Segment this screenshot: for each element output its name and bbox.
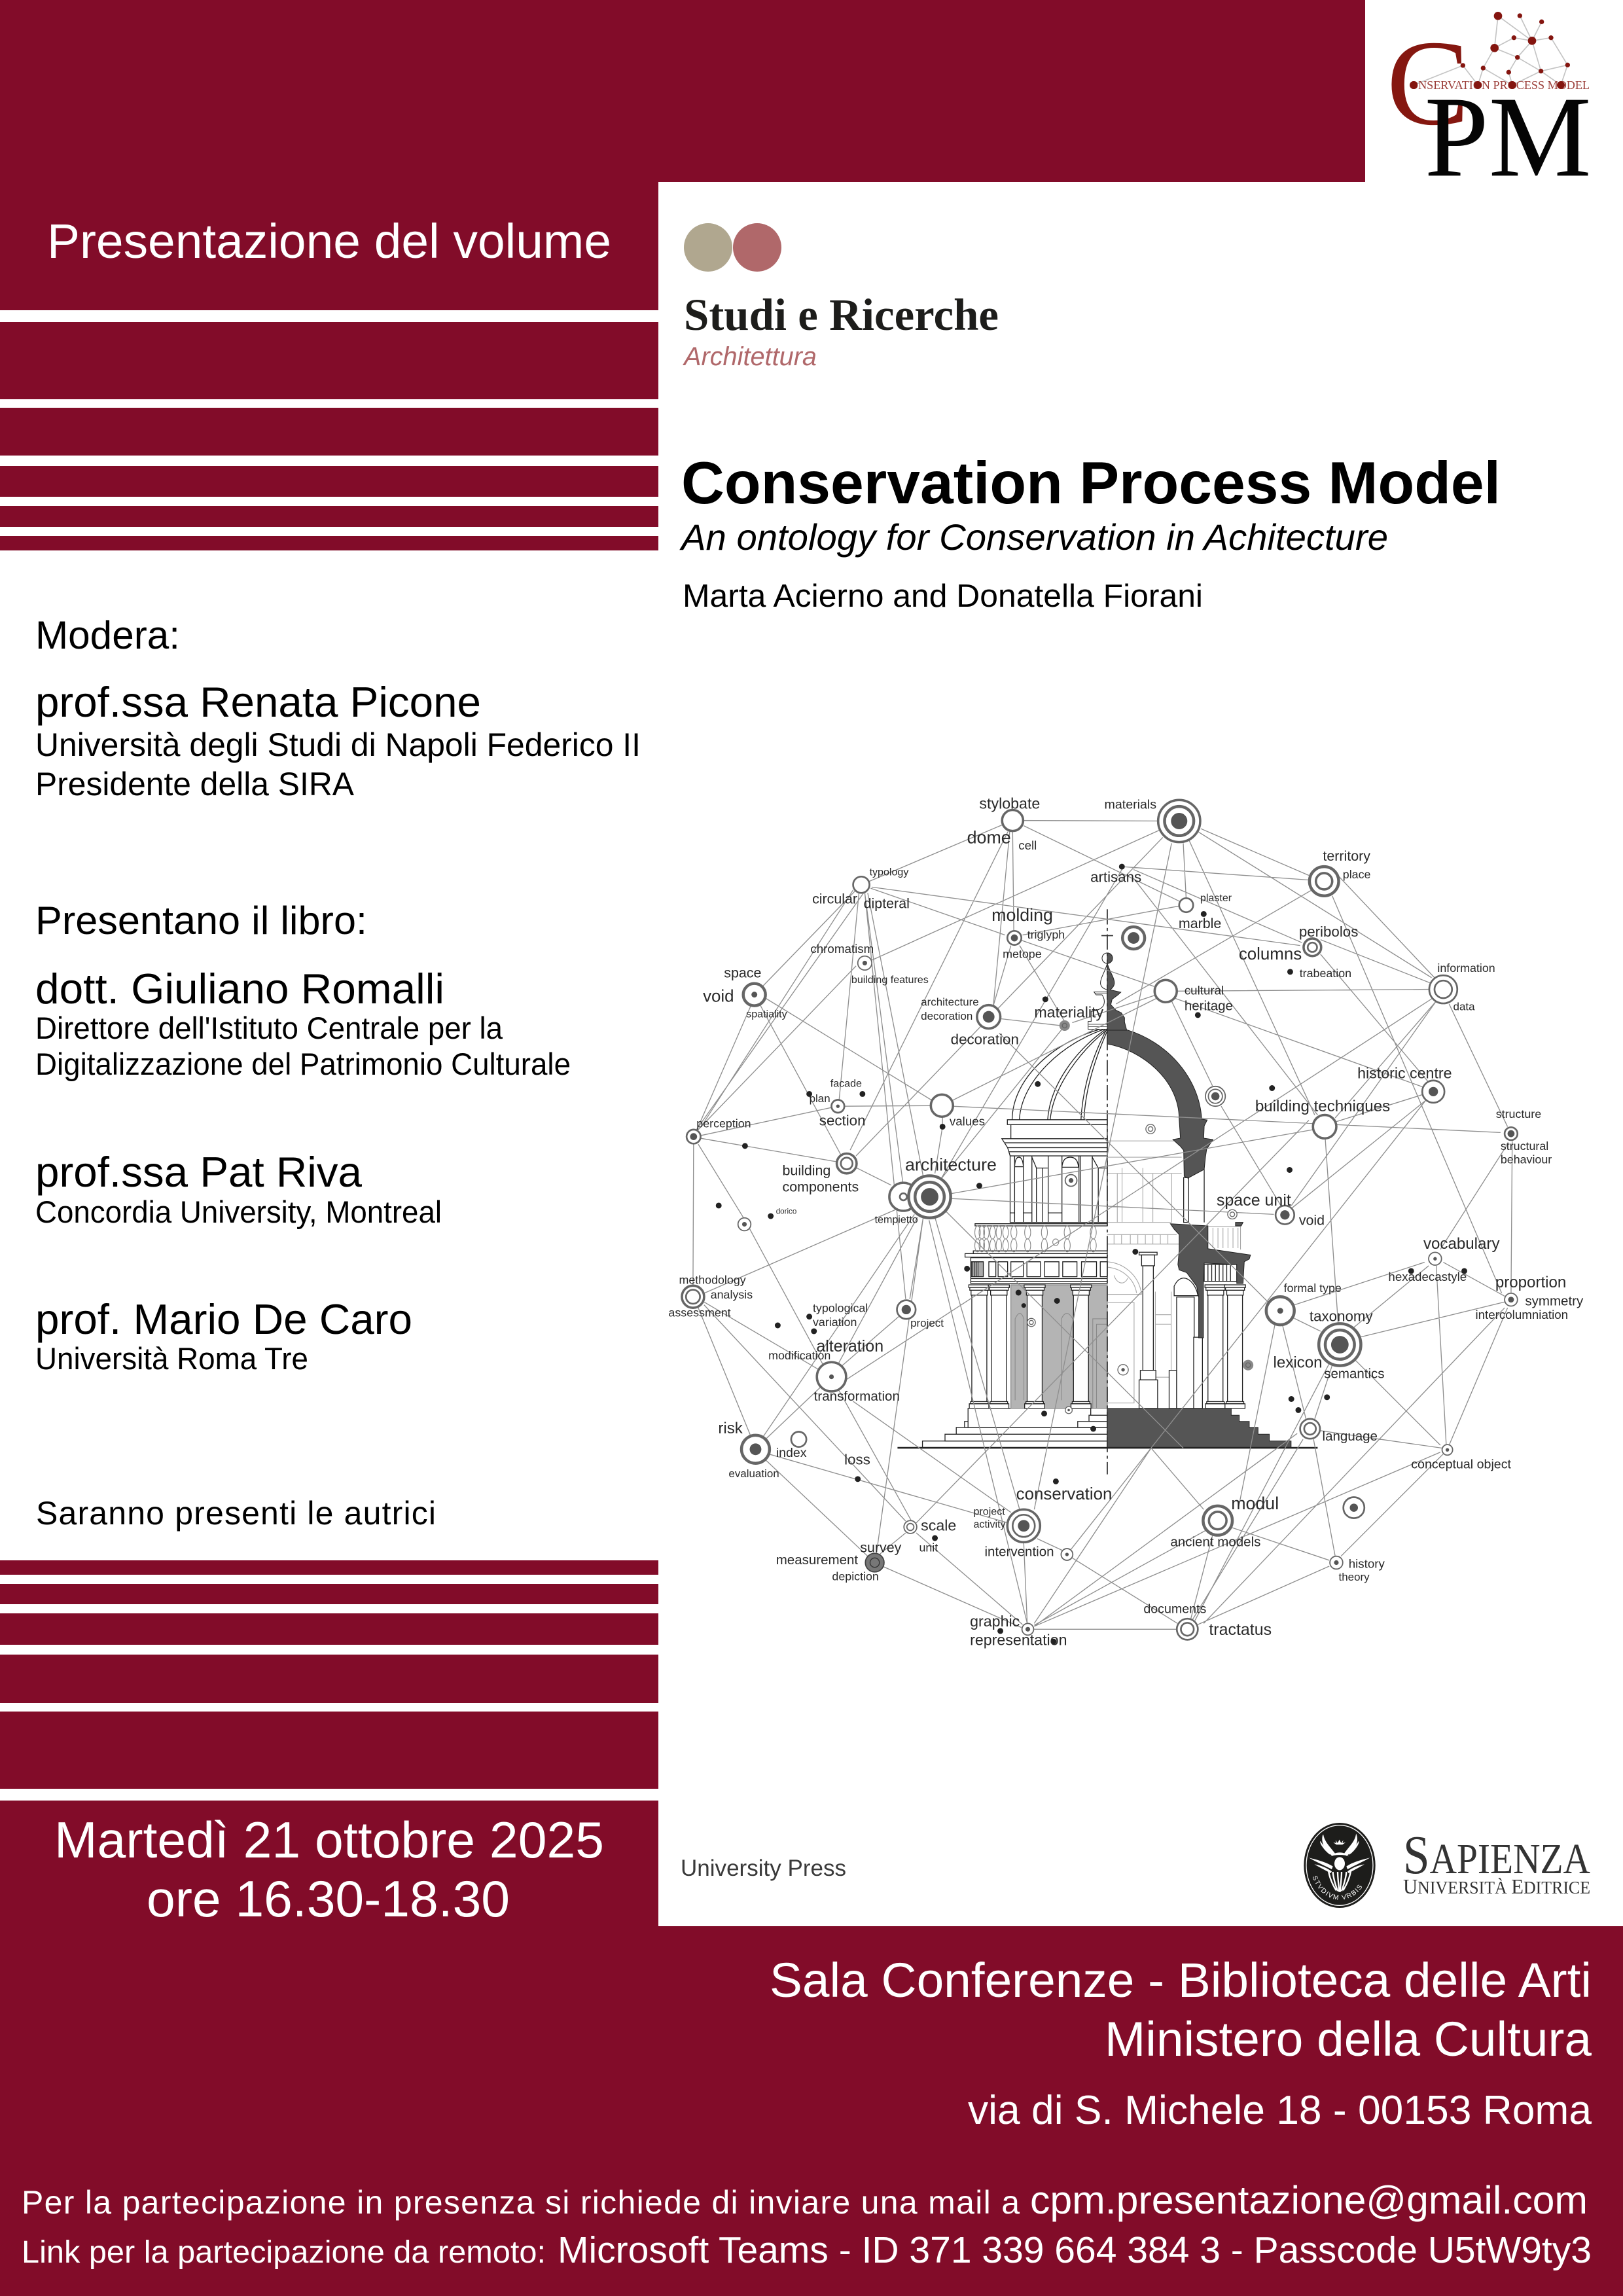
venue: Sala Conferenze - Biblioteca delle Arti xyxy=(770,1953,1592,2007)
logo nodes xyxy=(1410,12,1570,89)
network labels: space xyxy=(724,965,761,981)
network labels xyxy=(668,795,1584,1648)
network labels: symmetry xyxy=(1525,1294,1584,1309)
network labels: vocabulary xyxy=(1423,1235,1500,1253)
network labels: hexadecastyle xyxy=(1388,1270,1467,1283)
network labels: alteration xyxy=(816,1337,883,1355)
network edges xyxy=(693,821,1512,1629)
network labels: trabeation xyxy=(1300,967,1351,980)
logo tagline: ONSERVATION PROCESS MODEL xyxy=(1410,79,1590,92)
centre axis xyxy=(1101,909,1113,1475)
network labels: modification xyxy=(768,1349,830,1362)
network labels: space unit xyxy=(1217,1191,1291,1210)
network labels: risk xyxy=(718,1420,743,1437)
node: taxonomy xyxy=(1319,1323,1361,1366)
steps and platform xyxy=(923,1408,1107,1448)
frieze xyxy=(965,1253,1107,1283)
network labels: intervention xyxy=(984,1545,1054,1560)
series mark: two circles xyxy=(684,223,781,272)
network labels: project xyxy=(973,1505,1005,1517)
network labels: ancient models xyxy=(1170,1534,1260,1549)
text block: moderator xyxy=(35,613,641,802)
section cut: base xyxy=(1107,1408,1291,1448)
network labels: variation xyxy=(813,1316,857,1329)
network labels: conceptual object xyxy=(1411,1458,1512,1472)
text block: speakers: dott. Giuliano Romalli xyxy=(35,965,444,1013)
text block: moderator: Presidente della SIRA xyxy=(35,766,355,802)
network labels: dome xyxy=(967,827,1011,847)
participation info: Per la partecipazione in presenza si richiede di inviare una mail a xyxy=(22,2184,1020,2221)
network labels: graphic xyxy=(970,1613,1020,1630)
network labels: dipteral xyxy=(864,895,910,911)
network labels: place xyxy=(1343,868,1371,881)
network labels: formal type xyxy=(1284,1282,1342,1295)
network labels: history xyxy=(1349,1557,1385,1571)
left heading band xyxy=(0,182,658,310)
network labels: representation xyxy=(970,1631,1067,1648)
network nodes xyxy=(682,800,1518,1644)
book subtitle: An ontology for Conservation in Achitecture xyxy=(679,516,1388,558)
logo letters PM: PM xyxy=(1425,73,1592,201)
network labels: architecture xyxy=(921,996,979,1009)
network labels: triglyph xyxy=(1027,928,1065,941)
logo network lines xyxy=(1414,16,1567,85)
network labels: theory xyxy=(1339,1571,1370,1583)
network labels: historic centre xyxy=(1357,1064,1452,1081)
network labels: cell xyxy=(1018,838,1037,852)
network labels: decoration xyxy=(921,1010,972,1022)
network labels: facade xyxy=(830,1078,862,1090)
network labels: materiality xyxy=(1034,1003,1103,1020)
balustrade xyxy=(973,1224,1107,1253)
network labels: tempietto xyxy=(875,1214,918,1226)
network labels: plaster xyxy=(1200,892,1232,904)
text block: speakers: prof. Mario De Caro xyxy=(35,1295,412,1343)
network labels: information xyxy=(1437,961,1495,975)
icon: Sapienza seal xyxy=(1304,1823,1376,1908)
network labels: typology xyxy=(870,866,908,878)
header band xyxy=(0,0,1365,182)
network labels: circular xyxy=(812,891,857,906)
participation info xyxy=(22,2178,1592,2271)
text block: speakers: Presentano il libro: xyxy=(35,899,367,942)
network labels: language xyxy=(1323,1429,1378,1444)
network labels: architecture xyxy=(905,1155,997,1174)
publisher: university press: University Press xyxy=(681,1856,846,1881)
network labels: decoration xyxy=(951,1031,1019,1048)
network labels: survey xyxy=(860,1539,902,1555)
network labels: building techniques xyxy=(1255,1098,1390,1115)
network labels: territory xyxy=(1323,848,1370,864)
footer band xyxy=(0,1801,1623,2296)
network labels: marble xyxy=(1179,916,1221,931)
venue xyxy=(770,1953,1592,2133)
right half, light elevation xyxy=(1107,1141,1182,1403)
network labels: behaviour xyxy=(1501,1153,1552,1166)
network labels: metope xyxy=(1003,947,1042,960)
network labels: columns xyxy=(1239,945,1302,963)
network labels: unit xyxy=(919,1541,938,1554)
other rings and dots xyxy=(682,810,1518,1640)
ontology network xyxy=(668,795,1584,1648)
network labels: tractatus xyxy=(1209,1621,1272,1639)
venue: via di S. Michele 18 - 00153 Roma xyxy=(968,2088,1592,2133)
network labels: taxonomy xyxy=(1310,1308,1373,1325)
dome, elevation xyxy=(1012,1028,1107,1120)
date and time: Martedì 21 ottobre 2025 xyxy=(54,1811,604,1869)
date and time: ore 16.30-18.30 xyxy=(147,1870,510,1928)
network labels: components xyxy=(783,1179,859,1195)
network labels: structure xyxy=(1496,1107,1541,1121)
small black dots xyxy=(716,864,1467,1644)
text block: moderator: prof.ssa Renata Picone xyxy=(35,678,481,726)
text block: speakers: Direttore dell'Istituto Centrale per la xyxy=(35,1011,503,1045)
text block: speakers: Concordia University, Montreal xyxy=(35,1194,442,1229)
network labels: void xyxy=(703,987,734,1005)
series subtitle: Architettura xyxy=(683,342,817,371)
network labels: activity xyxy=(973,1518,1006,1530)
network labels: cultural xyxy=(1185,984,1224,997)
text block: speakers: Digitalizzazione del Patrimonio Culturale xyxy=(35,1047,571,1081)
network labels: intercolumniation xyxy=(1475,1308,1568,1321)
network labels: void xyxy=(1299,1212,1325,1228)
network labels: molding xyxy=(991,905,1053,925)
text block: speakers: Università Roma Tre xyxy=(35,1341,308,1376)
icon: Sapienza seal: STVDIVM VRBIS xyxy=(1313,1876,1362,1900)
network labels: proportion xyxy=(1495,1274,1566,1291)
network labels: spatiality xyxy=(746,1008,787,1020)
drum xyxy=(1002,1120,1107,1223)
venue: Ministero della Cultura xyxy=(1105,2012,1592,2066)
network labels: perception xyxy=(696,1117,751,1130)
network labels: methodology xyxy=(679,1274,746,1287)
node: conservation xyxy=(1007,1509,1040,1542)
network labels: building features xyxy=(851,974,929,986)
network labels: structural xyxy=(1501,1139,1548,1153)
lower colonnade, elevation xyxy=(969,1285,1107,1408)
network labels: heritage xyxy=(1185,999,1233,1014)
network labels: materials xyxy=(1104,798,1156,812)
network labels: analysis xyxy=(711,1288,753,1301)
network labels: building xyxy=(783,1163,830,1179)
lantern, left elevation xyxy=(1088,963,1107,1030)
text block: speakers: prof.ssa Pat Riva xyxy=(35,1148,363,1196)
section cut: balcony and wall xyxy=(1170,1224,1251,1338)
series title: Studi e Ricerche xyxy=(684,290,999,340)
network labels: modul xyxy=(1231,1494,1279,1513)
network labels: depiction xyxy=(832,1570,879,1583)
network labels: evaluation xyxy=(728,1467,779,1480)
ground line xyxy=(897,1447,1317,1449)
publisher: Sapienza wordmark: SAPIENZA xyxy=(1403,1825,1590,1886)
network labels: semantics xyxy=(1324,1366,1385,1381)
network labels: typological xyxy=(813,1301,868,1314)
lantern and finial xyxy=(1088,953,1127,1030)
network labels: project xyxy=(910,1317,944,1329)
network labels: scale xyxy=(921,1516,956,1534)
book title: Conservation Process Model xyxy=(681,450,1501,516)
heading: presentazione del volume: Presentazione del volume xyxy=(47,214,611,268)
upper stripes xyxy=(0,322,658,550)
network labels: measurement xyxy=(776,1552,858,1568)
network labels: values xyxy=(950,1115,985,1128)
network labels: dorico xyxy=(776,1207,796,1215)
date and time xyxy=(54,1811,604,1928)
network labels: assessment xyxy=(668,1306,731,1319)
network labels: transformation xyxy=(814,1389,900,1404)
participation info: cpm.presentazione@gmail.com xyxy=(1030,2178,1588,2222)
section cut: dome xyxy=(1107,1030,1213,1178)
network labels: documents xyxy=(1143,1602,1207,1616)
lower stripes xyxy=(0,1560,658,1789)
book authors: Marta Acierno and Donatella Fiorani xyxy=(683,578,1203,614)
participation info: Microsoft Teams - ID 371 339 664 384 3 - Passcode U5tW9ty3 xyxy=(558,2229,1592,2271)
text block: moderator: Università degli Studi di Napoli Federico II xyxy=(35,726,641,763)
network labels: section xyxy=(819,1113,865,1129)
node: architecture xyxy=(889,1175,951,1218)
network labels: stylobate xyxy=(979,795,1040,812)
network labels: data xyxy=(1454,1001,1475,1013)
logo: CPM xyxy=(1387,12,1592,201)
logo letter C: C xyxy=(1387,16,1469,151)
lantern, right section xyxy=(1107,963,1127,1030)
network labels: artisans xyxy=(1090,869,1141,885)
network labels: peribolos xyxy=(1299,924,1358,940)
network labels: lexicon xyxy=(1274,1354,1323,1371)
tempietto drawing xyxy=(923,1028,1291,1448)
participation info: Link per la partecipazione da remoto: xyxy=(22,2235,546,2270)
text block: moderator: Modera: xyxy=(35,613,180,657)
text: authors present: Saranno presenti le autrici xyxy=(36,1495,436,1532)
finial ball xyxy=(1102,953,1113,963)
node: materials xyxy=(1158,800,1200,842)
network labels: conservation xyxy=(1016,1485,1112,1503)
network labels: index xyxy=(776,1446,807,1460)
text block: speakers xyxy=(35,899,571,1376)
network labels: plan xyxy=(810,1092,830,1105)
network labels: chromatism xyxy=(810,942,874,956)
network labels: loss xyxy=(844,1451,870,1467)
publisher: Sapienza wordmark: UNIVERSITÀ EDITRICE xyxy=(1403,1874,1590,1898)
